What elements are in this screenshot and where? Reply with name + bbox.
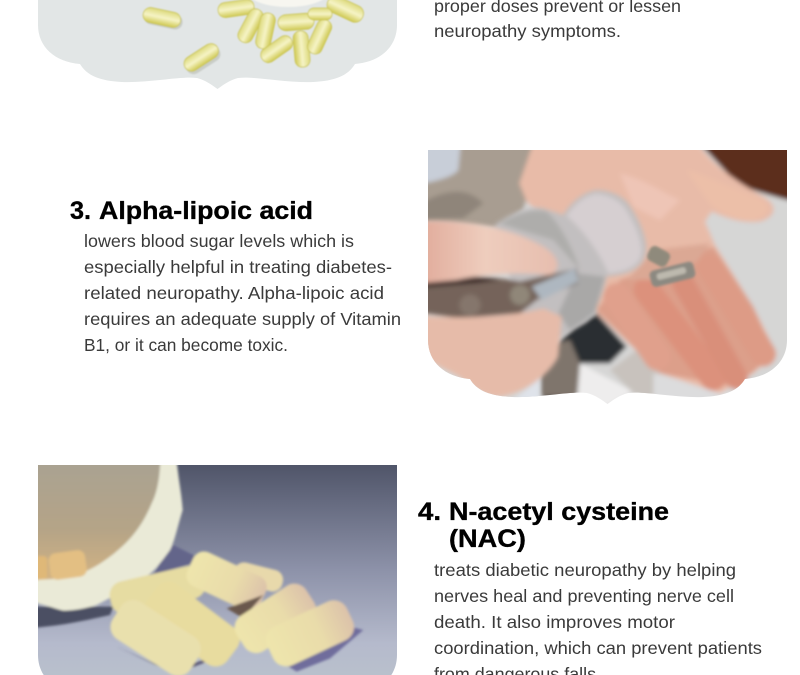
cup shadow xyxy=(23,607,113,628)
bowl xyxy=(254,0,322,7)
lower background xyxy=(542,312,628,396)
heading: 4. N-acetyl cysteine (NAC) xyxy=(418,498,669,553)
text: NAC description: nerves heal and preventing nerve cell xyxy=(434,586,734,606)
tablet: front right xyxy=(268,599,356,668)
tablet: top xyxy=(188,550,267,608)
fist: lower finger xyxy=(413,308,562,397)
fingers xyxy=(598,246,758,380)
capsule shadows xyxy=(146,18,221,74)
tablet: front left xyxy=(109,601,200,675)
text: alpha-lipoic acid description xyxy=(84,231,401,355)
heading: 3. Alpha-lipoic acid: Alpha-lipoic acid xyxy=(99,197,313,225)
text: NAC description: death. It also improves motor xyxy=(434,612,675,632)
tablet: back right xyxy=(236,561,284,593)
tablet: back left xyxy=(108,564,205,612)
capsules spilling through the jar xyxy=(413,268,578,318)
text: alpha-lipoic acid description: requires an adequate supply of Vitamin xyxy=(84,309,401,329)
capsules in palm xyxy=(645,244,672,269)
text: alpha-lipoic acid description: related neuropathy. Alpha-lipoic acid xyxy=(84,283,384,303)
heading: 3. Alpha-lipoic acid: 3. xyxy=(70,197,91,225)
text: alpha-lipoic acid description: especially helpful in treating diabetes- xyxy=(84,257,392,277)
glass jar xyxy=(495,190,646,340)
heading: 4. N-acetyl cysteine (NAC): N-acetyl cysteine xyxy=(449,498,669,526)
text: NAC description: treats diabetic neuropathy by helping xyxy=(434,560,736,580)
tablet: centre xyxy=(151,597,241,668)
photo: pouring capsules into a hand xyxy=(428,150,787,404)
photo: fish oil capsules xyxy=(38,0,397,95)
capsules xyxy=(142,0,366,74)
heading: 4. N-acetyl cysteine (NAC): 4. xyxy=(418,498,441,526)
text: item 2 closing lines xyxy=(434,0,681,41)
photo: tablets spilling from a bottle xyxy=(38,465,397,675)
text: item 2 closing lines: neuropathy symptoms. xyxy=(434,21,621,41)
text: NAC description: coordination, which can prevent patients xyxy=(434,638,762,658)
palm and thumb xyxy=(519,133,777,393)
fist: upper finger xyxy=(413,221,558,284)
tablet shadows xyxy=(283,627,363,672)
bottle xyxy=(38,465,184,613)
text: NAC description xyxy=(434,560,762,675)
heading: 4. N-acetyl cysteine (NAC): (NAC) xyxy=(449,525,526,553)
text: alpha-lipoic acid description: B1, or it can become toxic. xyxy=(84,335,288,355)
text: alpha-lipoic acid description: lowers blood sugar levels which is xyxy=(84,231,354,251)
tablet: middle right xyxy=(233,582,317,654)
